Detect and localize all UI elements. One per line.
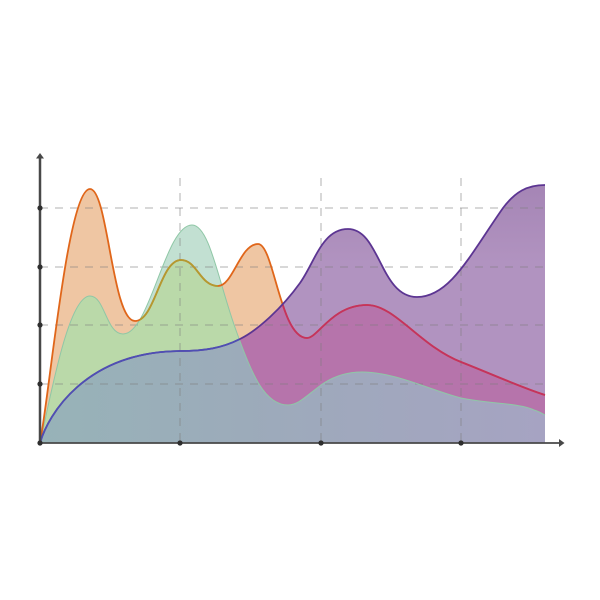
line: green series <box>40 225 545 443</box>
series lines <box>40 185 545 443</box>
line: purple series <box>40 185 545 443</box>
axis tick dots <box>37 205 464 446</box>
area: purple and green overlap <box>42 340 545 442</box>
dashed grid <box>40 178 545 443</box>
area: purple and orange overlap <box>240 306 545 414</box>
line: orange over green <box>135 260 218 321</box>
area fills <box>40 185 545 443</box>
area: purple series <box>40 185 545 443</box>
line: purple over green <box>40 339 240 443</box>
chart: layered area chart <box>36 153 564 447</box>
line: orange over purple <box>282 304 545 396</box>
axes <box>36 153 564 447</box>
y axis with arrow <box>36 153 44 443</box>
x axis with arrow <box>40 439 564 447</box>
area: orange series <box>40 189 545 443</box>
area: green series <box>40 225 545 443</box>
area: green and orange overlap <box>43 261 238 432</box>
line: orange series <box>40 189 545 443</box>
